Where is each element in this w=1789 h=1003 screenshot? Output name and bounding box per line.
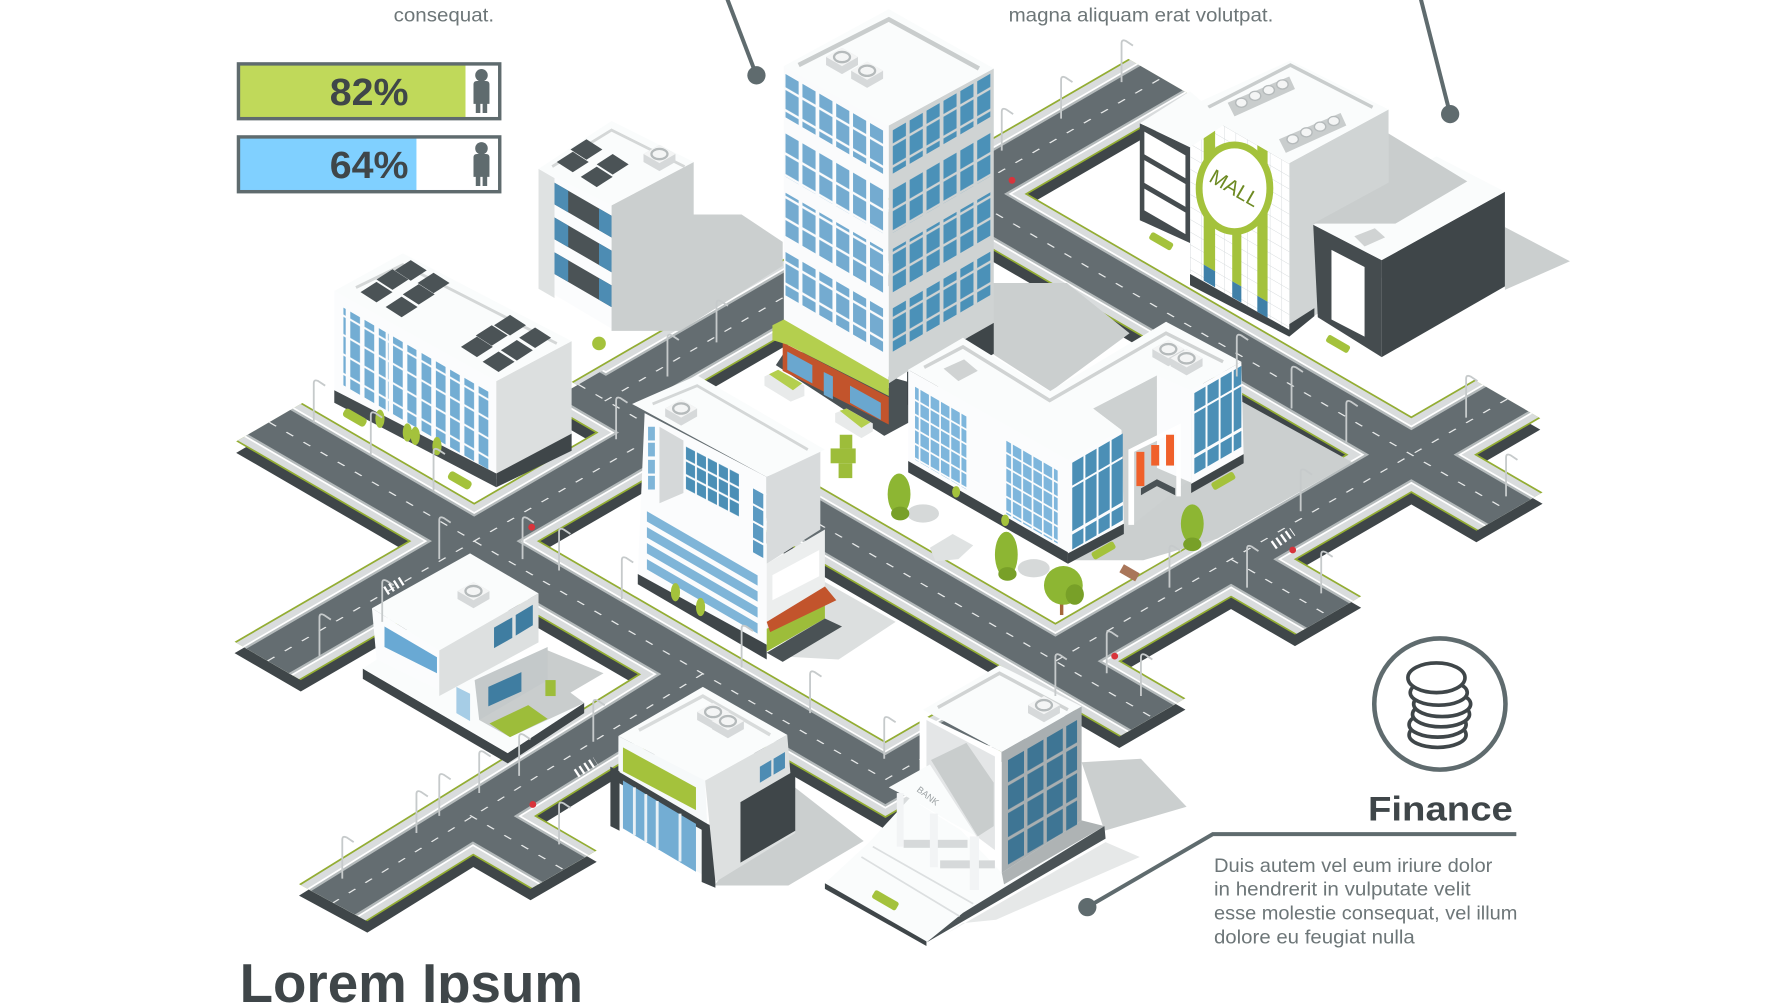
mall facade — [1190, 106, 1289, 330]
traffic markers and crosswalks — [386, 177, 1296, 808]
column shadows — [904, 840, 995, 868]
tree — [995, 532, 1018, 581]
shop roof — [618, 687, 787, 780]
blue bands — [647, 511, 758, 634]
grid window — [685, 445, 740, 518]
tower shop front — [764, 319, 889, 438]
small shrub — [592, 337, 606, 350]
small window columns — [648, 427, 655, 490]
leader line — [1078, 834, 1516, 916]
annex door — [1331, 250, 1365, 337]
mall round sign — [1199, 145, 1270, 232]
leader line: top center — [727, 0, 766, 84]
apartment roof — [539, 121, 694, 205]
apartment right wall and shadow — [612, 162, 783, 331]
building: bank — [825, 665, 1187, 946]
office left wall — [334, 291, 496, 479]
plaza trees and furniture — [831, 435, 1236, 615]
building: apartment with solar panels — [539, 121, 783, 350]
bank tower glass wall — [1002, 706, 1082, 873]
house upper right wall — [439, 593, 539, 696]
mall dark glazed wing — [1140, 123, 1190, 243]
building: solar-roof office — [334, 253, 572, 491]
mall round sign: MALL — [1205, 165, 1263, 212]
office shrubs and benches — [342, 407, 473, 491]
stat bar: 64% — [238, 137, 500, 192]
tower right windows — [891, 72, 993, 353]
leader line: top right — [1420, 0, 1459, 123]
center office roof — [632, 375, 825, 477]
pediment — [889, 765, 977, 836]
planters — [764, 370, 804, 402]
shrubs — [671, 583, 705, 616]
house plate — [363, 669, 584, 763]
bank portico: BANK — [915, 784, 941, 808]
finance body text: Duis autem vel eum iriure dolor — [1214, 855, 1493, 877]
shop shadow — [714, 785, 864, 885]
fountain — [930, 534, 973, 561]
building: dark annex — [1148, 134, 1570, 357]
building: mall — [1140, 60, 1389, 337]
ground shadows — [776, 283, 1352, 933]
mall base — [1190, 274, 1314, 337]
office right wall — [496, 341, 572, 479]
stat bar: 64%: 64% — [330, 144, 408, 186]
recessed panel — [659, 427, 683, 503]
tree shadows — [907, 504, 1050, 577]
building: center-left office — [632, 375, 842, 662]
tower shop platform — [776, 348, 909, 436]
house lower wall — [475, 647, 548, 720]
tree — [888, 474, 910, 520]
L courtyard — [1093, 375, 1191, 527]
steps — [861, 847, 973, 916]
top center text fragment: magna aliquam erat volutpat. — [1009, 5, 1273, 27]
orange banners — [1136, 435, 1174, 486]
tower left wall — [784, 66, 889, 388]
office base — [334, 390, 496, 487]
shop posts — [610, 767, 620, 831]
mall right wall — [1289, 110, 1389, 330]
center office base — [638, 574, 767, 660]
green canopy — [772, 319, 889, 396]
stat bar: 82%: 82% — [330, 71, 408, 113]
house floor shadow — [479, 650, 604, 737]
apartment left wall — [539, 169, 612, 329]
shop floor — [767, 618, 842, 662]
building: L-shaped office — [908, 322, 1244, 564]
stat bar: 82% — [238, 64, 500, 119]
bank shadow — [1082, 759, 1187, 831]
courtyard wing front — [1157, 375, 1191, 483]
benches — [1091, 541, 1116, 560]
L left wall — [908, 370, 1068, 553]
apartment window bands — [539, 169, 612, 331]
columns — [897, 793, 979, 890]
mall roof — [1190, 60, 1389, 163]
shrub tower — [831, 435, 856, 478]
bank roof — [923, 665, 1082, 752]
glass door — [456, 687, 470, 721]
planters — [952, 486, 1009, 526]
bank bench — [871, 890, 900, 911]
top left text fragment: consequat. — [394, 5, 494, 27]
L wing right wall — [1191, 362, 1244, 484]
finance body text: esse molestie consequat, vel illum — [1214, 903, 1517, 925]
finance body text: dolore eu feugiat nulla — [1214, 927, 1415, 949]
panel: finance — [1078, 638, 1517, 949]
bank dark side — [926, 826, 1106, 943]
street lamps — [314, 40, 1517, 879]
shop green sign — [623, 747, 696, 810]
annex left wall — [1313, 225, 1382, 357]
house upper left wall — [372, 608, 439, 690]
rooftop unit — [643, 145, 675, 171]
orange awning — [767, 587, 836, 632]
tower left windows — [784, 73, 885, 353]
L roof units — [1152, 340, 1184, 366]
tower right wall — [889, 68, 994, 383]
annex roof — [1313, 156, 1505, 260]
finance body text: in hendrerit in vulputate velit — [1214, 879, 1471, 901]
finance heading: Finance — [1368, 790, 1513, 828]
shop right wall — [705, 735, 795, 882]
annex right wall — [1382, 192, 1505, 357]
shop left wall — [618, 736, 710, 879]
office roof — [334, 253, 572, 381]
solar panels — [557, 139, 629, 187]
annex shadow — [1505, 227, 1570, 290]
round tree — [1044, 566, 1084, 615]
icon: person — [473, 142, 489, 186]
roof units — [1228, 76, 1346, 153]
mall green stripes — [1204, 114, 1215, 271]
building: corner shop — [610, 687, 864, 888]
green shop — [767, 601, 825, 652]
mall shadow on annex — [1313, 134, 1467, 224]
L roof — [908, 322, 1241, 460]
tower roof — [784, 9, 994, 126]
tree — [1181, 504, 1204, 551]
icon: person — [473, 69, 489, 113]
tower roof units — [826, 48, 858, 74]
bank portico — [861, 765, 995, 916]
bank base grey — [1002, 820, 1104, 884]
sign board — [772, 550, 819, 600]
lower windows — [488, 672, 521, 706]
house roof — [372, 553, 539, 650]
office windows — [343, 308, 491, 471]
icon: coins in circle — [1374, 638, 1505, 770]
finance body text — [1214, 855, 1517, 949]
L front wall — [1068, 430, 1124, 553]
courtyard portal — [1128, 423, 1181, 525]
office solar panels — [361, 260, 551, 372]
potted tree — [545, 680, 556, 696]
center office left wall — [638, 413, 767, 650]
building: tall office tower — [764, 9, 994, 438]
annex bench — [1325, 334, 1351, 354]
building: house — [363, 553, 604, 763]
shop dark header — [610, 767, 707, 833]
green mat — [489, 705, 548, 737]
bank recess — [920, 713, 1002, 856]
shop glazing — [623, 780, 696, 872]
bank plate — [825, 787, 1106, 943]
center office right wall — [767, 450, 820, 564]
L left windows — [915, 387, 1058, 544]
